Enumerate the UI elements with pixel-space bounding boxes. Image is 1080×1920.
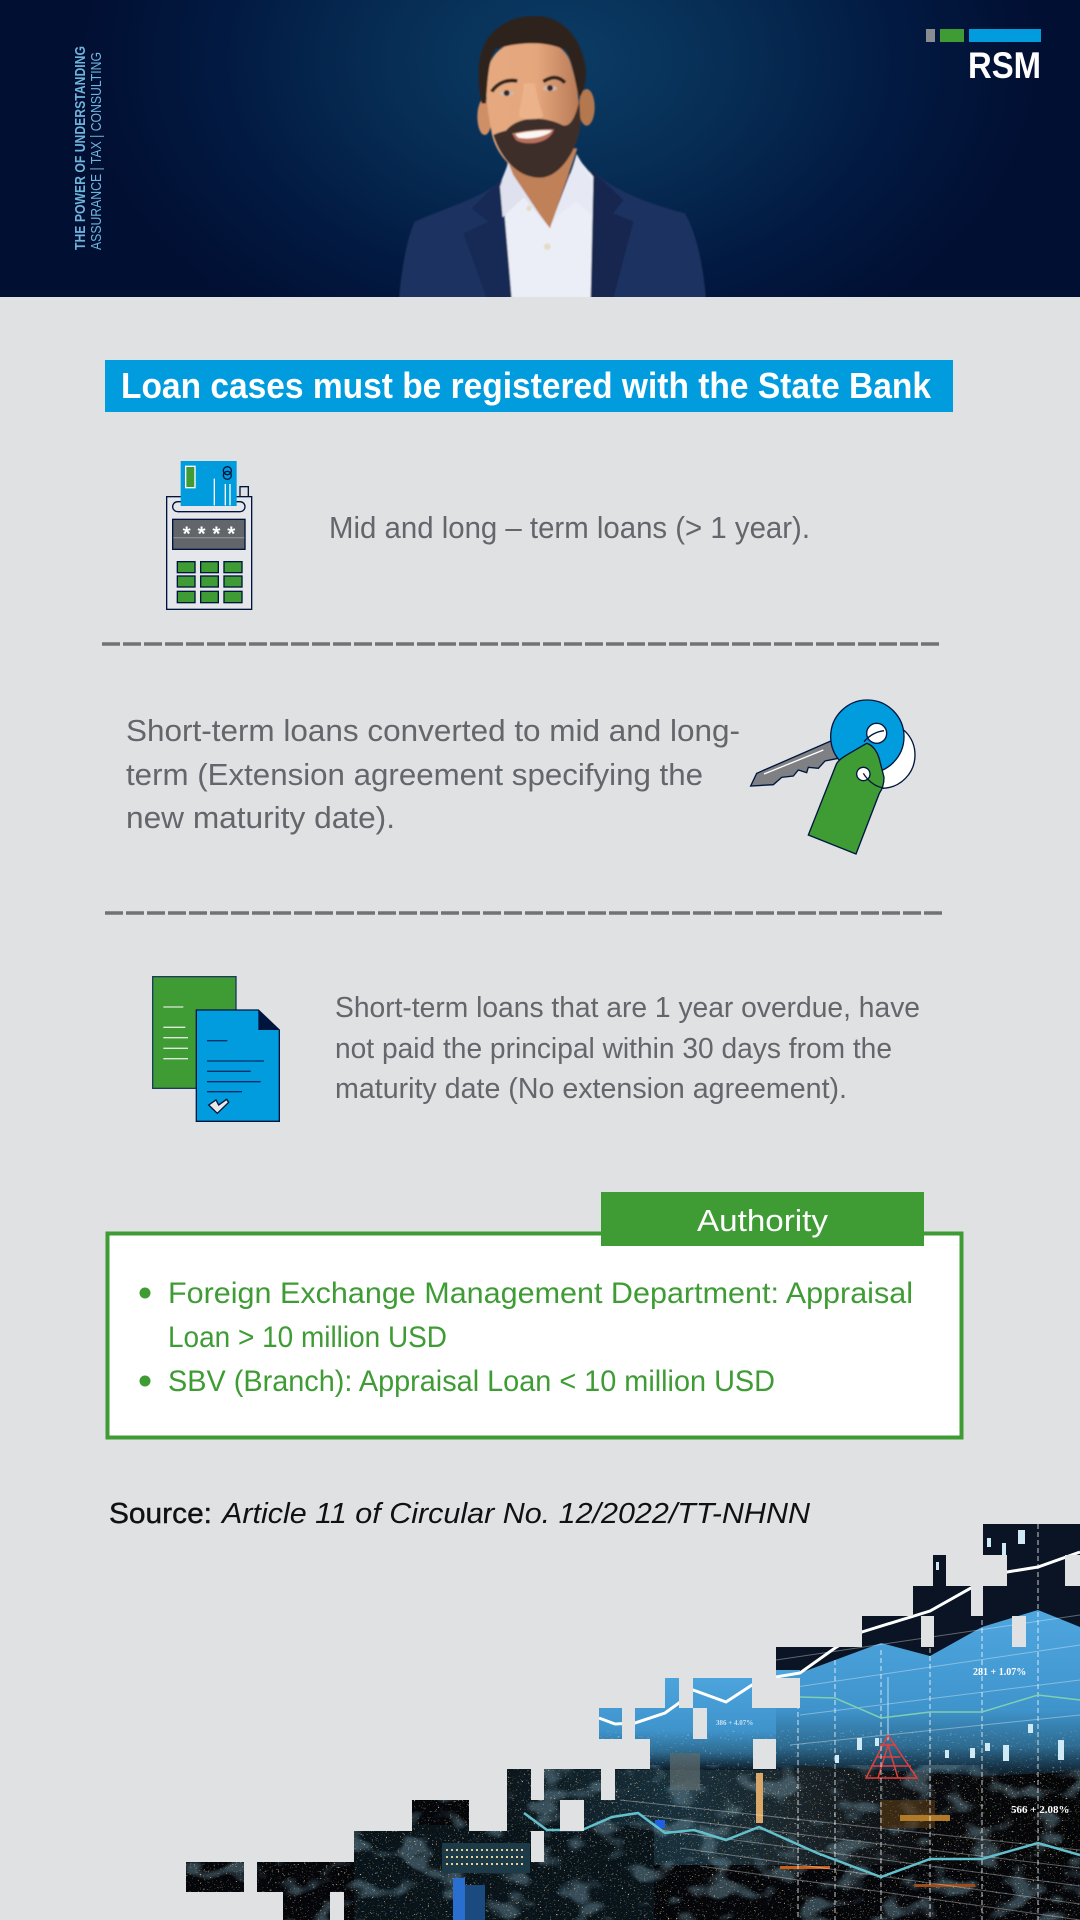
portrait of smiling man in navy suit <box>399 16 706 298</box>
blue chart area <box>776 1610 1080 1776</box>
text: short-term loans converted: new maturity date). <box>126 800 395 835</box>
chart line teal <box>524 1813 1080 1877</box>
icon: keys with green tag <box>751 700 915 854</box>
icon: card payment terminal: **** <box>183 523 236 546</box>
chart value labels <box>716 1667 1070 1816</box>
icon: documents with check mark <box>153 977 279 1121</box>
divider <box>102 642 942 646</box>
candlesticks <box>835 1530 1064 1763</box>
text: short-term loans converted: term (Extension agreement specifying the <box>126 757 703 792</box>
city skyline with stock chart overlay <box>180 1520 1080 1920</box>
header banner <box>0 0 1080 298</box>
chart value labels: 281 + 1.07% <box>973 1667 1026 1678</box>
glowing city buildings <box>442 1753 975 1920</box>
panel: authority <box>108 1192 962 1438</box>
text: short-term loans overdue: not paid the principal within 30 days from the <box>335 1033 892 1065</box>
text: short-term loans converted: Short-term loans converted to mid and long- <box>126 713 740 748</box>
RSM logo <box>926 29 1041 86</box>
chart value labels: 566 + 2.08% <box>1011 1804 1070 1816</box>
source line: Article 11 of Circular No. 12/2022/TT-NHNN <box>220 1498 810 1530</box>
chart line pale green <box>800 1695 1080 1718</box>
tower <box>866 1677 917 1778</box>
authority tab <box>601 1192 924 1246</box>
icon: card payment terminal <box>167 461 252 609</box>
title bar: Loan cases must be registered with the State Bank <box>121 365 932 406</box>
authority list: Foreign Exchange Management Department: Appraisal <box>168 1277 913 1310</box>
text: mid and long term loans: Mid and long – term loans (> 1 year). <box>329 510 810 545</box>
text: short-term loans overdue: Short-term loans that are 1 year overdue, have <box>335 992 920 1024</box>
text: short-term loans converted <box>126 713 740 835</box>
source line: Source: <box>109 1498 212 1530</box>
tagline: THE POWER OF UNDERSTANDING <box>72 46 89 250</box>
grid lines <box>620 1615 1080 1920</box>
RSM logo: RSM <box>968 45 1041 86</box>
vertical dashed lines <box>798 1524 1038 1920</box>
authority list: SBV (Branch): Appraisal Loan < 10 million USD <box>168 1365 775 1398</box>
text: short-term loans overdue <box>335 992 920 1105</box>
tagline: ASSURANCE | TAX | CONSULTING <box>88 52 105 250</box>
authority tab: Authority <box>697 1203 829 1238</box>
page area below banner <box>0 297 1080 327</box>
text: short-term loans overdue: maturity date (No extension agreement). <box>335 1073 847 1105</box>
chart line white <box>599 1552 1080 1724</box>
tagline <box>72 46 105 250</box>
divider <box>105 911 945 915</box>
authority list: Loan > 10 million USD <box>168 1321 447 1354</box>
authority list <box>140 1277 913 1398</box>
chart value labels: 386 + 4.07% <box>716 1719 753 1727</box>
